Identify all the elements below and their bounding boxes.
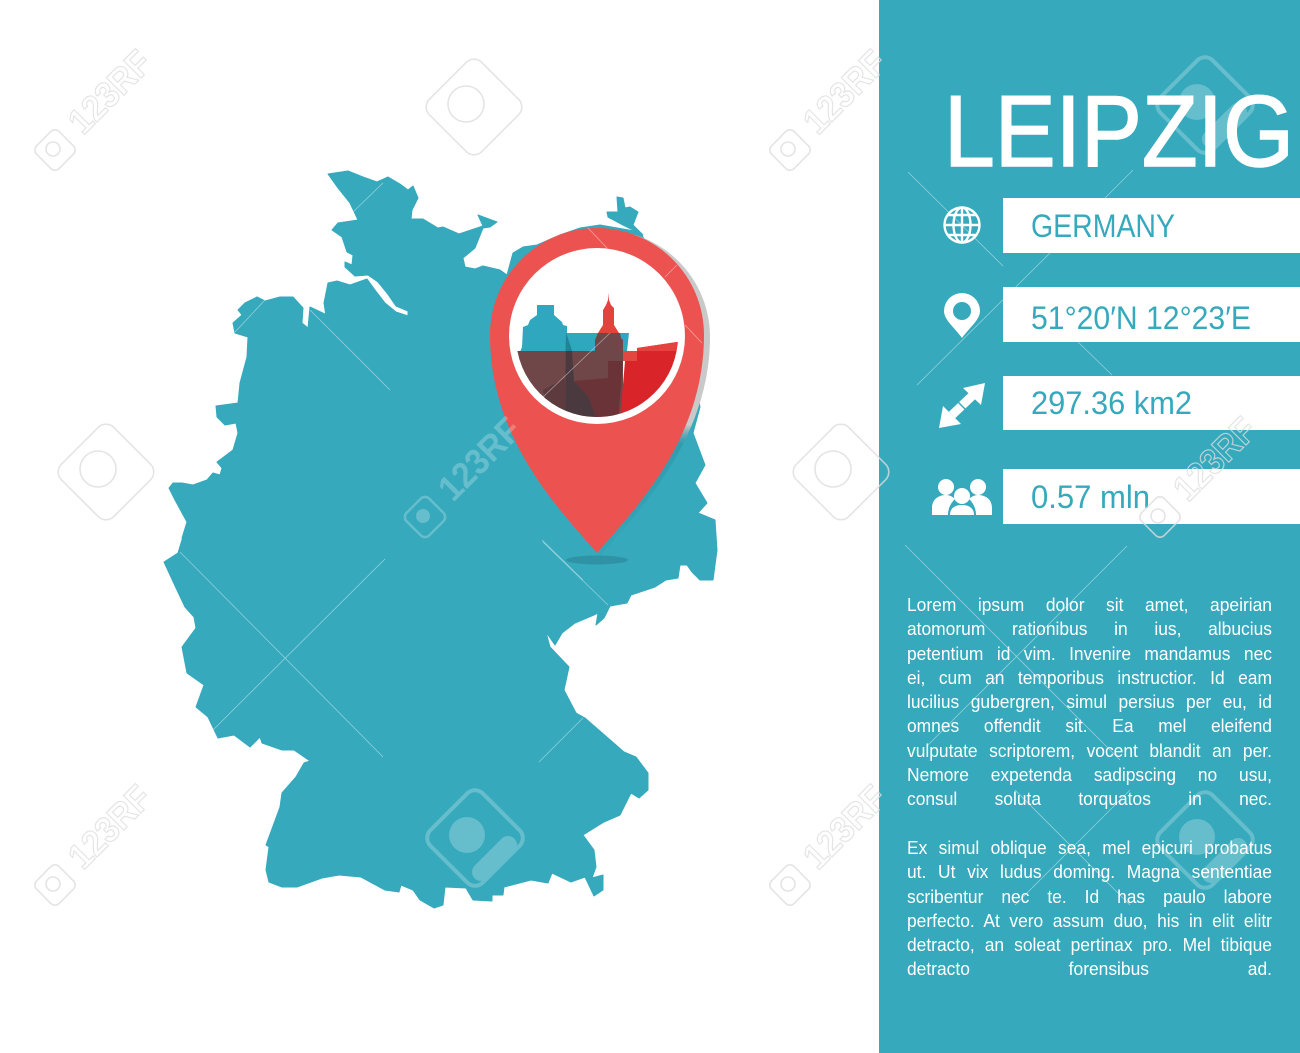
text block: second paragraph: scribentur nec te. Id has paulo labore — [907, 886, 1272, 907]
egg outline one — [54, 420, 158, 524]
text block: first paragraph: vulputate scriptorem, vocent blandit an per. — [907, 740, 1272, 761]
panel: city facts background — [879, 0, 1300, 1053]
egg stamp lower map — [423, 786, 527, 890]
icon: diagonal double arrow — [939, 383, 985, 428]
pin window — [509, 248, 685, 424]
bar — [1003, 469, 1300, 524]
watermark lines — [180, 170, 1133, 905]
stamp right: 123RF — [1165, 409, 1264, 509]
pin side shadow — [496, 230, 710, 556]
stamp bottom left: 123RF — [60, 777, 159, 877]
stamp text on map — [402, 409, 529, 540]
teal building — [518, 305, 629, 360]
value: 297.36 km2 — [1031, 385, 1192, 421]
bar — [1003, 376, 1300, 430]
text block: first paragraph: petentium id vim. Invenire mandamus nec — [907, 643, 1272, 664]
row: area — [1003, 376, 1300, 430]
value: GERMANY — [1031, 208, 1175, 244]
text block: first paragraph: consul soluta torquatos in nec. — [907, 788, 1272, 809]
stamp bottom middle — [767, 777, 894, 908]
stamp right — [1137, 409, 1264, 540]
text block: second paragraph — [907, 837, 1272, 979]
tower base — [595, 333, 623, 351]
location pin — [490, 228, 704, 553]
red tower — [598, 293, 619, 333]
stamp text on map: 123RF — [430, 409, 529, 509]
dark teal sliver — [566, 333, 572, 351]
map: Baltic island — [607, 197, 643, 235]
red building — [620, 342, 678, 414]
red-brown block — [574, 361, 623, 420]
text block: first paragraph: omnes offendit sit. Ea mel eleifend — [907, 715, 1272, 736]
red roof band — [637, 342, 677, 351]
row: country — [1003, 198, 1300, 253]
pin ground shadow — [566, 556, 628, 564]
text block: first paragraph: lucilius gubergren, simul persius per eu, id — [907, 691, 1272, 712]
icon: globe — [944, 207, 980, 243]
orange-red notch — [623, 351, 637, 361]
icon: location marker — [944, 293, 980, 338]
text block: first paragraph: Nemore expetenda sadipscing no usu, — [907, 764, 1272, 785]
row: coordinates — [1003, 287, 1300, 342]
brown ground block — [517, 351, 623, 417]
text block: second paragraph: ut. Ut vix ludus doming. Magna sententiae — [907, 861, 1272, 882]
value: 0.57 mln — [1031, 479, 1150, 515]
bar — [1003, 287, 1300, 342]
watermark: marks over the map and panel — [402, 53, 1257, 892]
stamp bottom middle: 123RF — [795, 777, 894, 877]
stamp bottom left — [32, 777, 159, 908]
row: population — [1003, 469, 1300, 524]
text block: first paragraph: ei, cum an temporibus instructior. Id eam — [907, 667, 1272, 688]
text block: first paragraph: Lorem ipsum dolor sit amet, apeirian — [907, 594, 1272, 615]
map: mainland — [164, 171, 717, 908]
stamp top middle — [767, 42, 894, 173]
left shadow block — [543, 378, 565, 410]
city skyline — [517, 293, 678, 417]
egg outline three — [789, 420, 893, 524]
text block: second paragraph: Ex simul oblique sea, mel epicuri probatus — [907, 837, 1272, 858]
egg stamp upper panel — [1153, 53, 1257, 157]
text block: second paragraph: detracto forensibus ad. — [907, 958, 1272, 979]
map: Germany — [164, 171, 717, 908]
stamp top left — [32, 42, 159, 173]
text block: first paragraph — [907, 594, 1272, 809]
egg outline two — [422, 55, 526, 159]
stamp top left: 123RF — [60, 42, 159, 142]
text block: second paragraph: perfecto. At vero assum duo, his in elit elitr — [907, 910, 1272, 931]
egg stamp lower panel — [1153, 788, 1257, 892]
text block: first paragraph: atomorum rationibus in ius, albucius — [907, 618, 1272, 639]
pin body — [490, 228, 704, 553]
value: 51°20′N 12°23′E — [1031, 300, 1251, 336]
watermark: outlined stamps — [32, 42, 1264, 908]
bar — [1003, 198, 1300, 253]
stamp top middle: 123RF — [795, 42, 894, 142]
text block: second paragraph: detracto, an soleat pertinax pro. Mel tibique — [907, 934, 1272, 955]
icon: people — [932, 479, 992, 515]
dark facade — [565, 333, 597, 420]
